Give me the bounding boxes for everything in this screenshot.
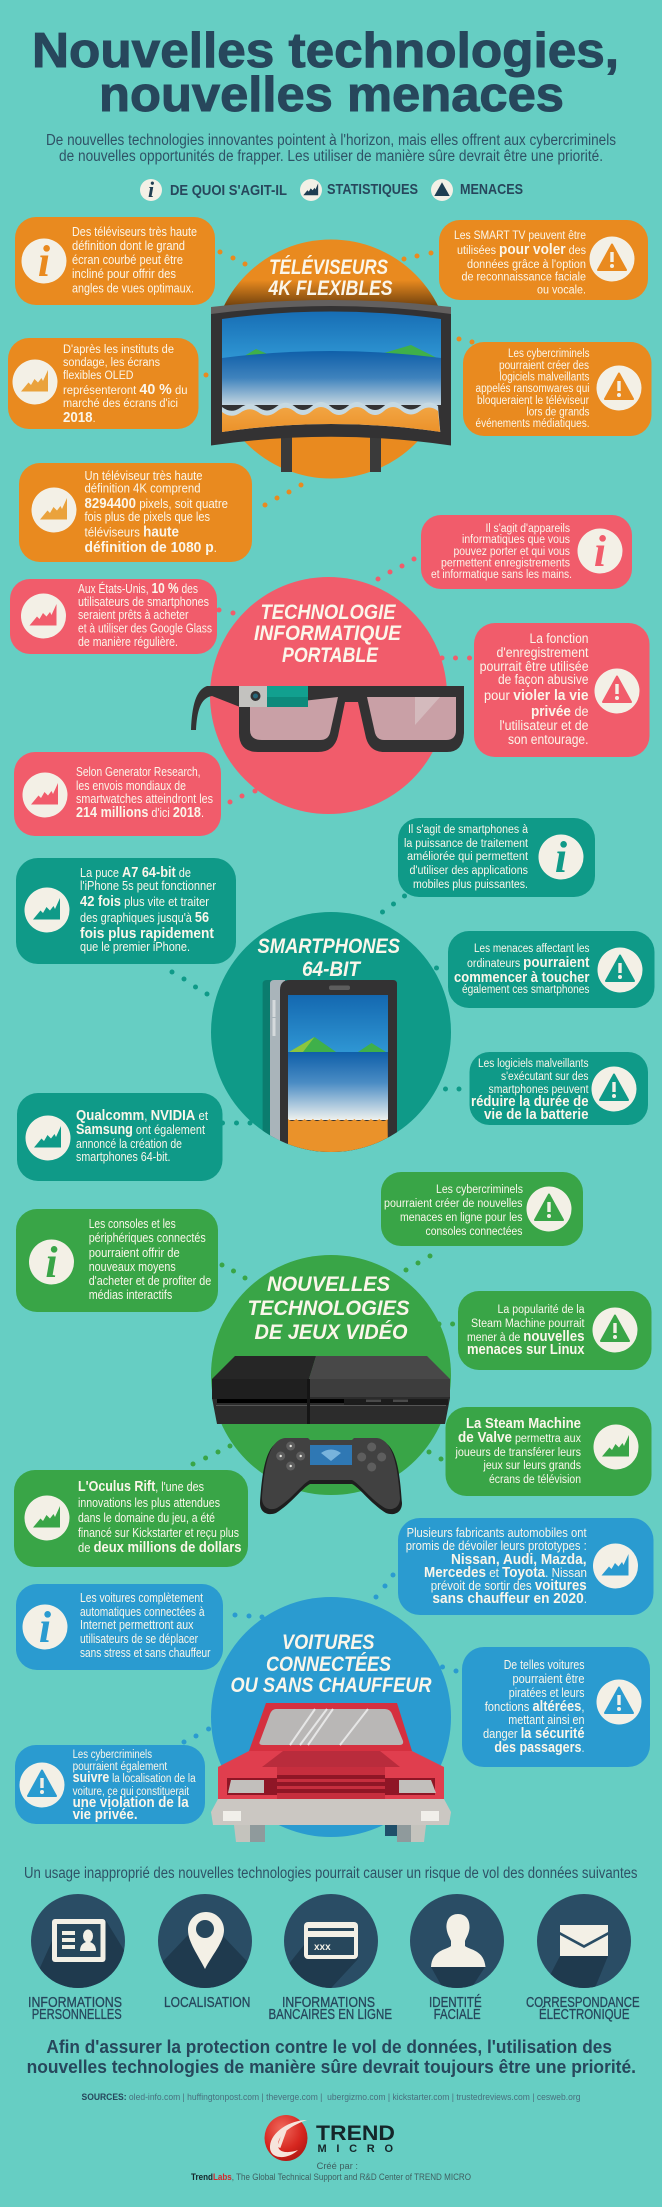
panel text: Les voitures complètement — [80, 1591, 203, 1605]
panel text — [483, 1658, 585, 1756]
icon: chart — [32, 488, 76, 532]
panel text: Les consoles et les — [89, 1217, 176, 1231]
panel text: De telles voitures — [504, 1658, 584, 1672]
icon: warning — [590, 236, 634, 282]
panel text: commencer à toucher — [454, 970, 590, 986]
panel text: fonctions altérées, — [485, 1699, 584, 1715]
panel text: menaces en ligne pour les — [400, 1212, 523, 1224]
heading: connected cars: VOITURES — [282, 1631, 374, 1654]
panel text: Samsung ont également — [76, 1122, 205, 1138]
icon: chart — [24, 888, 70, 932]
label — [526, 1995, 640, 2023]
panel text: son entourage. — [508, 732, 588, 747]
panel text: l'iPhone 5s peut fonctionner — [80, 879, 216, 893]
panel text — [80, 1591, 210, 1660]
panel text: smartwatches atteindront les — [76, 792, 213, 806]
panel text: pourraient être — [512, 1672, 585, 1686]
section: connected cars — [15, 1518, 654, 1842]
panel text — [72, 225, 197, 296]
heading: televisions — [211, 256, 451, 306]
panel text: vie de la batterie — [484, 1107, 588, 1123]
panel text — [76, 765, 213, 821]
icon: chart — [593, 1544, 638, 1588]
heading: connected cars: CONNECTÉES — [266, 1653, 391, 1676]
panel text: Mercedes et Toyota. Nissan — [424, 1565, 587, 1581]
panel text: de manière régulière. — [78, 635, 178, 649]
panel text: joueurs de transférer leurs — [455, 1447, 581, 1459]
panel: computer threats — [448, 931, 654, 1008]
panel text: utilisateurs de se déplacer — [80, 1632, 198, 1646]
label: FACIALE — [434, 2007, 481, 2023]
illustration: game controller — [260, 1438, 402, 1514]
panel: wearable definition — [421, 515, 632, 589]
title: nouvelles menaces — [99, 68, 564, 122]
panel text: Les cybercriminels — [508, 348, 590, 360]
panel: Steam Machine statistic — [446, 1407, 652, 1496]
panel: Linux threat — [458, 1291, 652, 1370]
dotted connectors — [182, 1572, 458, 1744]
panel: hijacking threat — [462, 1647, 650, 1767]
panel text: médias interactifs — [89, 1288, 172, 1302]
panel text: 8294400 pixels, soit quatre — [84, 496, 228, 512]
panel text: écran courbé peut être — [72, 253, 183, 267]
icon: info — [22, 237, 66, 286]
panel text: définition de 1080 p. — [84, 540, 217, 556]
panel text: menaces sur Linux — [467, 1342, 584, 1358]
data type: online banking: xxx — [314, 1942, 331, 1953]
panel text: périphériques connectés — [89, 1231, 206, 1245]
panel text: la puissance de traitement — [404, 838, 529, 850]
intro text: de nouvelles opportunités de frapper. Les utiliser de manière sûre devrait être une priorité. — [59, 148, 603, 165]
panel: tracking threat — [15, 1745, 205, 1824]
intro text — [46, 132, 616, 165]
panel text: mener à de nouvelles — [467, 1329, 584, 1345]
panel text: données grâce à l'option — [467, 259, 586, 271]
icon: warning — [592, 1308, 638, 1352]
panel text: et à utiliser des Google Glass — [78, 622, 212, 636]
panel: OLED statistic — [8, 338, 198, 429]
panel: 4K pixels statistic — [19, 463, 252, 562]
logo: Trend Micro: MICRO — [318, 2143, 393, 2155]
panel text: Les cybercriminels — [73, 1749, 152, 1761]
logo: Trend Micro: TREND — [316, 2122, 395, 2145]
panel text: Il s'agit d'appareils — [486, 523, 570, 535]
panel: Google Glass statistic — [10, 579, 217, 654]
panel text — [455, 1416, 581, 1486]
panel text: les envois mondiaux de — [76, 779, 186, 793]
heading: video games — [248, 1273, 410, 1344]
panel text: Les menaces affectant les — [474, 943, 590, 955]
panel text: smartphones peuvent — [488, 1084, 589, 1096]
panel text: automatiques connectées à — [80, 1605, 205, 1619]
panel text: suivre la localisation de la — [73, 1770, 196, 1786]
panel text — [406, 1526, 587, 1607]
label: PERSONNELLES — [32, 2007, 122, 2023]
panel text: flexibles OLED — [63, 370, 134, 382]
illustration: smart glasses — [191, 686, 464, 752]
panel text — [454, 230, 586, 296]
panel text: Steam Machine pourrait — [471, 1318, 585, 1330]
panel: new threats for consoles — [381, 1172, 583, 1246]
legend: what is it: i — [148, 177, 155, 202]
panel text: Qualcomm, NVIDIA et — [76, 1108, 208, 1124]
panel: definition — [15, 217, 215, 305]
data type: email — [526, 1894, 640, 2023]
closing statement: Afin d'assurer la protection contre le vol de données, l'utilisation des — [46, 2037, 612, 2057]
panel text: seraient prêts à acheter — [78, 608, 188, 622]
panel: car makers statistic — [398, 1518, 654, 1615]
illustration: red car — [211, 1703, 451, 1842]
dotted connectors — [204, 250, 474, 508]
panel text: écrans de télévision — [489, 1474, 581, 1486]
circle: blue — [211, 1597, 451, 1837]
legend: statistics: STATISTIQUES — [327, 181, 418, 198]
panel text: pouvez porter et qui vous — [454, 546, 570, 558]
panel text: Les logiciels malveillants — [478, 1058, 589, 1070]
panel text: financé sur Kickstarter et reçu plus — [78, 1526, 239, 1540]
panel text: Selon Generator Research, — [76, 765, 200, 779]
illustration: game console — [212, 1356, 450, 1424]
panel text: d'utiliser des applications — [410, 865, 528, 877]
icon: warning — [20, 1762, 64, 1808]
icon: info: i — [39, 1603, 52, 1652]
icon: chart — [21, 594, 66, 638]
panel: Oculus Rift statistic — [14, 1470, 248, 1567]
panel text: informatiques que vous — [462, 534, 570, 546]
panel text: piratées et leurs — [509, 1686, 584, 1700]
label: IDENTITÉ — [429, 1994, 482, 2011]
panel: smartwatch statistic — [14, 752, 221, 836]
panel text: des passagers. — [494, 1740, 584, 1756]
dotted connectors — [170, 894, 462, 1126]
panel text — [78, 581, 212, 649]
panel text: événements médiatiques. — [476, 418, 590, 430]
panel text: sans chauffeur en 2020. — [432, 1591, 587, 1607]
heading: video games: TECHNOLOGIES — [248, 1297, 410, 1320]
panel text: Nissan, Audi, Mazda, — [451, 1552, 586, 1568]
panel text: pourraient également — [73, 1761, 168, 1773]
icon: info: i — [45, 1238, 58, 1287]
data type: facial identity — [410, 1894, 504, 2023]
label: LOCALISATION — [164, 1995, 250, 2011]
panel text: de deux millions de dollars — [78, 1540, 242, 1556]
panel text: D'après les instituts de — [63, 344, 174, 356]
heading: connected cars — [230, 1631, 432, 1697]
label — [429, 1994, 482, 2023]
sources: SOURCES: oled-info.com | huffingtonpost.com | theverge.com | ubergizmo.com | kickstarter.com | trustedreviews.com | cesweb.org — [82, 2092, 580, 2103]
icon: info — [538, 833, 584, 882]
panel text: Des téléviseurs très haute — [72, 225, 197, 239]
panel text: nouveaux moyens — [89, 1260, 176, 1274]
data type: personal information — [28, 1894, 130, 2023]
panel text: prévoit de sortir des voitures — [431, 1578, 587, 1594]
icon: warning — [526, 1186, 572, 1232]
panel text: de Valve permettra aux — [458, 1430, 581, 1446]
panel: ransomware threat — [463, 342, 652, 436]
legend: threats: MENACES — [460, 181, 523, 198]
panel text — [431, 523, 572, 581]
panel text: 2018. — [63, 410, 96, 426]
heading: wearable: INFORMATIQUE — [254, 622, 402, 645]
panel text: pourrait être utilisée — [480, 659, 589, 674]
panel text — [73, 1749, 196, 1823]
icon: chart — [22, 772, 68, 818]
label — [28, 1995, 122, 2023]
panel text — [76, 1108, 208, 1164]
section: 64-bit smartphones — [16, 818, 654, 1181]
panel text: ordinateurs pourraient — [467, 955, 590, 971]
heading: connected cars: OU SANS CHAUFFEUR — [230, 1674, 432, 1697]
panel text: 214 millions d'ici 2018. — [76, 805, 204, 821]
icon: info — [578, 527, 622, 576]
panel: manufacturers statistic — [17, 1093, 222, 1181]
panel text: permettent enregistrements — [441, 558, 570, 570]
panel text: La popularité de la — [498, 1304, 585, 1316]
panel text: La fonction — [530, 631, 588, 646]
panel: privacy threat — [474, 623, 650, 757]
panel text: d'acheter et de profiter de — [89, 1274, 211, 1288]
section: televisions — [8, 217, 652, 562]
circle: orange — [212, 240, 450, 478]
heading: wearable: TECHNOLOGIE — [260, 601, 396, 624]
panel text: Les cybercriminels — [436, 1184, 523, 1196]
panel text: appelés ransomwares qui — [476, 383, 590, 395]
panel: A7 chip statistic — [16, 858, 236, 964]
heading: smartphones: 64-BIT — [302, 958, 362, 981]
panel text — [78, 1479, 242, 1556]
panel text — [476, 348, 590, 430]
panel text — [480, 631, 589, 747]
icon: info: i — [38, 237, 51, 286]
panel text: représenteront 40 % du — [63, 382, 188, 398]
section: video game technologies — [14, 1172, 652, 1567]
closing statement: nouvelles technologies de manière sûre devrait toujours être une priorité. — [27, 2057, 636, 2077]
panel text: Internet permettront aux — [80, 1618, 194, 1632]
legend — [140, 177, 523, 202]
panel text — [384, 1184, 523, 1238]
heading: televisions: TÉLÉVISEURS — [269, 256, 388, 279]
panel text: sondage, les écrans — [63, 357, 160, 369]
panel text: de reconnaissance faciale — [462, 272, 586, 284]
legend: statistics — [300, 179, 418, 201]
panel text: logiciels malveillants — [500, 372, 590, 384]
icon: info — [29, 1238, 74, 1287]
panel text: bloqueraient le téléviseur — [477, 395, 589, 407]
panel text: téléviseurs haute — [84, 524, 179, 540]
panel text — [471, 1058, 589, 1123]
credit — [191, 2161, 471, 2182]
panel text: des graphiques jusqu'à 56 — [80, 910, 209, 926]
label: INFORMATIONS — [282, 1995, 375, 2011]
panel text: La puce A7 64-bit de — [80, 865, 191, 881]
panel text: privée de — [531, 704, 588, 720]
panel text: voiture, ce qui constituerait — [73, 1786, 190, 1798]
panel text — [467, 1304, 585, 1358]
illustration: smartphone — [263, 980, 397, 1160]
panel: battery threat — [470, 1052, 648, 1125]
panel text: innovations les plus attendues — [78, 1496, 220, 1510]
panel text: L'Oculus Rift, l'une des — [78, 1479, 204, 1495]
panel: smart TV threat — [439, 220, 648, 300]
panel text: pour violer la vie — [484, 688, 588, 704]
panel text: mettant ainsi en — [508, 1713, 585, 1727]
panel text: 42 fois plus vite et traiter — [80, 894, 209, 910]
icon: info: i — [555, 833, 568, 882]
label: ÉLECTRONIQUE — [539, 2006, 630, 2023]
icon: chart — [26, 1116, 70, 1160]
panel text — [80, 865, 216, 954]
heading: video games: DE JEUX VIDÉO — [254, 1321, 408, 1344]
heading: wearable — [254, 601, 402, 667]
label: BANCAIRES EN LIGNE — [268, 2007, 392, 2023]
panel text: pourraient offrir de — [89, 1246, 180, 1260]
icon: warning — [596, 1680, 642, 1724]
panel text: de façon abusive — [498, 672, 588, 687]
panel text: utilisateurs de smartphones — [78, 595, 209, 609]
circle: teal — [211, 912, 451, 1152]
panel text — [89, 1217, 211, 1302]
panel text — [404, 824, 529, 891]
legend: what is it — [140, 177, 287, 202]
panel text — [63, 344, 188, 426]
heading: wearable: PORTABLE — [282, 644, 379, 667]
illustration: curved TV — [211, 300, 451, 472]
icon: info — [22, 1603, 68, 1652]
icon: chart — [24, 1496, 70, 1540]
panel text: jeux sur leurs grands — [483, 1460, 581, 1472]
panel text: une violation de la — [73, 1795, 189, 1811]
panel text: Aux États-Unis, 10 % des — [78, 581, 198, 597]
heading: televisions: 4K FLEXIBLES — [268, 277, 392, 300]
panel text: annoncé la création de — [76, 1137, 182, 1151]
panel text: marché des écrans d'ici — [63, 398, 178, 410]
icon: chart — [12, 360, 58, 404]
panel text: pourraient créer des — [499, 360, 589, 372]
title — [32, 24, 619, 122]
panel text: consoles connectées — [426, 1226, 523, 1238]
legend: threats — [431, 179, 523, 201]
panel text: améliorée qui permettent — [407, 851, 529, 863]
panel text: réduire la durée de — [471, 1094, 588, 1110]
panel text: et informatique sans les mains. — [431, 569, 572, 581]
panel text: mobiles plus puissantes. — [413, 879, 528, 891]
icon: chart — [594, 1424, 638, 1470]
icon: warning — [592, 1066, 636, 1112]
panel text: incliné pour offrir des — [72, 267, 176, 281]
icon: warning — [598, 948, 642, 992]
panel text: danger la sécurité — [483, 1726, 584, 1742]
section: wearable technology — [10, 515, 650, 836]
panel text: l'utilisateur et de — [500, 718, 588, 733]
panel text: s'exécutant sur des — [501, 1071, 589, 1083]
circle: red — [210, 577, 447, 814]
icon: info: i — [594, 527, 607, 576]
panel text: sans stress et sans chauffeur — [80, 1646, 210, 1660]
label — [268, 1995, 392, 2023]
icon: warning — [594, 668, 640, 714]
panel text: également ces smartphones — [462, 984, 590, 996]
heading: smartphones — [258, 935, 400, 981]
panel text: angles de vues optimaux. — [72, 282, 194, 296]
panel text: fois plus rapidement — [80, 926, 214, 942]
panel text: Il s'agit de smartphones à — [408, 824, 529, 836]
logo: Trend Micro — [264, 2115, 395, 2161]
credit: TrendLabs, The Global Technical Support and R&D Center of TREND MICRO — [191, 2172, 471, 2182]
panel text: promis de dévoiler leurs prototypes : — [406, 1539, 587, 1553]
credit: Créé par : — [317, 2161, 358, 2171]
circle: green — [211, 1255, 451, 1495]
panel text: La Steam Machine — [466, 1416, 581, 1432]
label: INFORMATIONS — [28, 1995, 122, 2011]
panel text — [454, 943, 590, 996]
heading: video games: NOUVELLES — [267, 1273, 390, 1296]
panel text: Les SMART TV peuvent être — [454, 230, 586, 242]
panel text: définition 4K comprend — [84, 482, 201, 496]
title: Nouvelles technologies, — [32, 24, 619, 78]
heading: smartphones: SMARTPHONES — [258, 935, 400, 958]
panel text — [84, 469, 228, 556]
dotted connectors — [190, 1254, 455, 1466]
closing statement — [27, 2037, 636, 2077]
panel text: pourraient créer de nouvelles — [384, 1198, 523, 1210]
icon: warning — [596, 366, 642, 410]
data type: online banking — [268, 1894, 392, 2023]
data type: location — [158, 1894, 252, 2008]
panel text: définition dont le grand — [72, 239, 185, 253]
panel text: Plusieurs fabricants automobiles ont — [407, 1526, 587, 1540]
panel text: que le premier iPhone. — [80, 940, 190, 954]
panel: smartphone definition — [398, 818, 595, 897]
legend: what is it: DE QUOI S'AGIT-IL — [170, 182, 287, 199]
panel text: d'enregistrement — [496, 645, 589, 660]
panel text: fois plus de pixels que les — [84, 510, 210, 524]
dotted connectors — [216, 556, 472, 804]
panel: console definition — [16, 1209, 218, 1312]
panel text: vie privée. — [73, 1807, 138, 1823]
panel text: smartphones 64-bit. — [76, 1150, 170, 1164]
panel text: dans le domaine du jeu, a été — [78, 1511, 215, 1525]
panel: car definition — [16, 1584, 223, 1670]
panel text: Un téléviseur très haute — [84, 469, 203, 483]
panel text: utilisées pour voler des — [457, 242, 586, 258]
panel text: ou vocale. — [537, 284, 586, 296]
panel text: lors de grands — [526, 406, 590, 418]
